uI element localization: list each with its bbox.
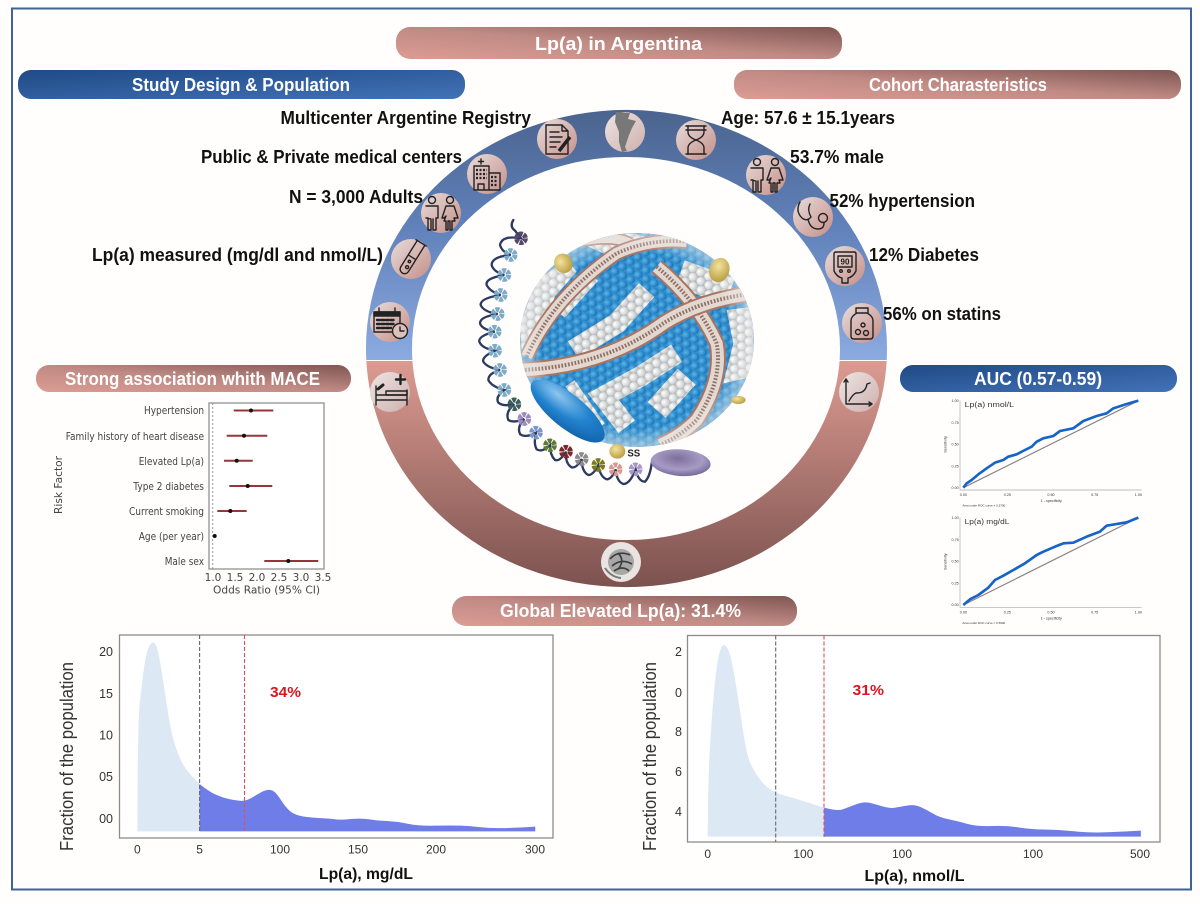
x axis labels (704, 847, 1150, 861)
y axis labels: 6 (675, 765, 682, 779)
y axis labels: 8 (675, 725, 682, 739)
density chart: Lp(a) nmol/L (640, 636, 1160, 885)
forest plot: x axis: 2.5 (271, 572, 287, 584)
icon: stethoscope (793, 197, 833, 237)
forest plot: x axis: 1.0 (205, 572, 221, 584)
apolipoprotein B oval (522, 369, 614, 453)
icon: line chart (839, 372, 879, 412)
icon: adults left (421, 193, 461, 233)
ROC curve: Lp(a) nmol/L: 1.00 (952, 399, 959, 403)
y axis title: Fraction of the population (640, 662, 660, 851)
apo(a) kringle chain (479, 220, 652, 484)
sphere of beads (520, 233, 754, 447)
density chart: Lp(a) mg/dL (57, 635, 553, 883)
text block: cohort items (721, 108, 1001, 324)
ring: upper blue arc (366, 110, 887, 360)
icon: Argentina map (605, 112, 645, 152)
icon: calendar and clock (370, 302, 410, 342)
percent label: 34% (270, 684, 301, 701)
ROC curve: Lp(a) mg/dL: 0.50 (1047, 610, 1055, 614)
forest plot: odds ratios (52, 403, 331, 596)
text block: cohort items: Age: 57.6 ± 15.1years (721, 108, 895, 128)
icon: male and female (746, 155, 786, 195)
ROC curve: Lp(a) mg/dL: 0.75 (1091, 610, 1098, 614)
text block: study design items: Lp(a) measured (mg/dl and nmol/L) (92, 245, 383, 265)
forest plot: risk factor labels (66, 405, 204, 568)
ROC curve: Lp(a) mg/dL: 0.75 (952, 538, 959, 542)
density: above threshold area (200, 784, 535, 831)
density: below threshold area (708, 645, 824, 837)
text block: study design items: Public & Private medical centers (201, 147, 462, 167)
forest plot: x axis: 2.0 (249, 572, 265, 584)
text block: study design items: N = 3,000 Adults (289, 187, 423, 207)
ROC curve: Lp(a) mg/dL: 0.25 (1004, 610, 1011, 614)
icon: test tube (391, 239, 431, 279)
icon: hourglass (676, 120, 716, 160)
ring: lower rose arc (366, 361, 887, 588)
forest plot: x axis: 3.0 (293, 572, 309, 584)
ROC curve: Lp(a) nmol/L: 0.50 (952, 443, 959, 447)
ROC curve: Lp(a) mg/dL: 1 - specificity (1041, 616, 1062, 620)
ROC curve: Lp(a) mg/dL: 1.00 (1135, 610, 1142, 614)
ROC curve: Lp(a) mg/dL: Lp(a) mg/dL (965, 517, 1009, 526)
density: below threshold area (137, 642, 200, 831)
icon: hospital (467, 154, 507, 194)
x axis labels: 200 (426, 842, 446, 856)
yellow surface blobs (551, 250, 746, 459)
disulfide bond label: SS (627, 449, 641, 460)
icon: glucose meter: 90 (841, 258, 850, 266)
ROC curve: Lp(a) mg/dL: Area under ROC curve = 0.5900 (962, 621, 1006, 625)
ROC curve: Lp(a) nmol/L: Area under ROC curve = 0.5700 (962, 504, 1006, 508)
forest plot: risk factor labels: Family history of heart disease (66, 431, 204, 443)
text block: cohort items: 56% on statins (883, 304, 1001, 324)
icon: hospital bed (370, 372, 410, 412)
icon: particle micrograph (601, 542, 641, 582)
heading: global elevated Lp(a): Global Elevated Lp(a): 31.4% (500, 601, 741, 621)
forest plot: x axis: 1.5 (227, 572, 243, 584)
threshold lines (776, 636, 824, 842)
ROC curve: Lp(a) nmol/L: 0.00 (960, 493, 967, 497)
y axis labels: 00 (99, 812, 113, 826)
ring diagram (366, 110, 887, 587)
x axis labels (134, 842, 545, 856)
heading: AUC: AUC (0.57-0.59) (974, 369, 1102, 389)
icon: statin bottle (842, 303, 882, 343)
y axis labels: 05 (99, 770, 113, 784)
x axis labels: 100 (270, 842, 290, 856)
percent label: 31% (852, 682, 884, 699)
y axis labels: 10 (99, 728, 113, 742)
ROC curve: Lp(a) nmol/L: 0.25 (952, 464, 959, 468)
forest plot: confidence intervals (217, 410, 318, 561)
ROC curve: Lp(a) nmol/L: 1.00 (1135, 493, 1142, 497)
forest plot: risk factor labels: Male sex (165, 556, 204, 568)
x axis labels: 100 (793, 847, 814, 861)
density: above threshold area (824, 802, 1141, 837)
heading: global elevated Lp(a) (452, 596, 797, 626)
forest plot: risk factor labels: Current smoking (129, 506, 204, 518)
ROC curve: Lp(a) mg/dL: Sensitivity (943, 553, 947, 570)
x axis labels: 5 (196, 842, 203, 856)
x axis labels: 0 (704, 847, 711, 861)
x axis title: Lp(a), nmol/L (864, 868, 965, 885)
heading: association with MACE: Strong association whith MACE (65, 369, 320, 389)
forest plot: risk factor labels: Type 2 diabetes (132, 481, 204, 493)
y axis labels: 20 (99, 645, 113, 659)
forest plot: risk factor labels: Age (per year) (139, 531, 204, 543)
x axis labels: 0 (134, 842, 141, 856)
text block: study design items: Multicenter Argentine Registry (280, 108, 531, 128)
icon: registry document (537, 119, 577, 159)
heading: association with MACE (36, 365, 351, 392)
forest plot: x axis: Odds Ratio (95% CI) (213, 584, 320, 596)
ROC curve: Lp(a) mg/dL: 0.50 (952, 560, 959, 564)
x axis labels: 300 (525, 842, 545, 856)
text block: cohort items: 53.7% male (790, 147, 884, 167)
central Lp(a) particle illustration (479, 220, 754, 484)
text block: study design items (92, 108, 531, 265)
ROC curve: Lp(a) nmol/L: 0.00 (952, 486, 959, 490)
title (396, 27, 842, 59)
heading: cohort characteristics: Cohort Charasteristics (869, 75, 1047, 95)
ROC curve: Lp(a) nmol/L (943, 399, 1142, 508)
heading: study design and population: Study Design & Population (132, 75, 350, 95)
text block: cohort items: 12% Diabetes (869, 245, 979, 265)
y axis title: Fraction of the population (57, 662, 77, 851)
heading: AUC (900, 365, 1177, 392)
y axis labels (675, 645, 682, 819)
threshold lines (200, 635, 244, 831)
x axis title: Lp(a), mg/dL (319, 866, 413, 883)
forest plot: y axis title: Risk Factor (52, 456, 65, 514)
ROC curve: Lp(a) mg/dL: 0.25 (952, 581, 959, 585)
heading: study design and population (18, 70, 465, 99)
y axis labels: 15 (99, 687, 113, 701)
y axis labels: 4 (675, 805, 682, 819)
ROC curve: Lp(a) nmol/L: Sensitivity (943, 436, 947, 453)
y axis labels (99, 645, 113, 826)
ROC curve: Lp(a) mg/dL: 0.00 (952, 603, 959, 607)
white bead regions (520, 233, 753, 427)
forest plot: x axis: 3.5 (315, 572, 331, 584)
forest plot: risk factor labels: Elevated Lp(a) (139, 456, 204, 468)
ROC curve: Lp(a) nmol/L: Lp(a) nmol/L (965, 400, 1014, 409)
ROC curve: Lp(a) mg/dL (943, 516, 1142, 625)
lipid ribbons (522, 238, 753, 445)
ROC curve: Lp(a) nmol/L: 0.25 (1004, 493, 1011, 497)
ROC curve: Lp(a) nmol/L: 0.75 (952, 421, 959, 425)
title: Lp(a) in Argentina (535, 34, 703, 54)
y axis labels: 2 (675, 645, 682, 659)
text block: cohort items: 52% hypertension (830, 191, 975, 211)
ROC curve: Lp(a) nmol/L: 1 - specificity (1041, 499, 1062, 503)
ROC curve: Lp(a) nmol/L: 0.50 (1047, 493, 1055, 497)
x axis labels: 100 (892, 847, 912, 861)
ROC curve: Lp(a) nmol/L: 0.75 (1091, 493, 1098, 497)
ROC curve: Lp(a) mg/dL: 0.00 (960, 610, 967, 614)
forest plot: point estimates (213, 408, 290, 563)
y axis labels: 0 (675, 686, 682, 700)
x axis labels: 150 (348, 842, 368, 856)
x axis labels: 500 (1130, 847, 1150, 861)
purple protease domain oval (650, 447, 712, 478)
heading: cohort characteristics (734, 70, 1181, 99)
forest plot: risk factor labels: Hypertension (144, 405, 204, 417)
icon: glucose meter (825, 246, 865, 286)
forest plot: x axis (205, 572, 331, 596)
ROC curve: Lp(a) mg/dL: 1.00 (952, 516, 959, 520)
x axis labels: 100 (1023, 847, 1043, 861)
